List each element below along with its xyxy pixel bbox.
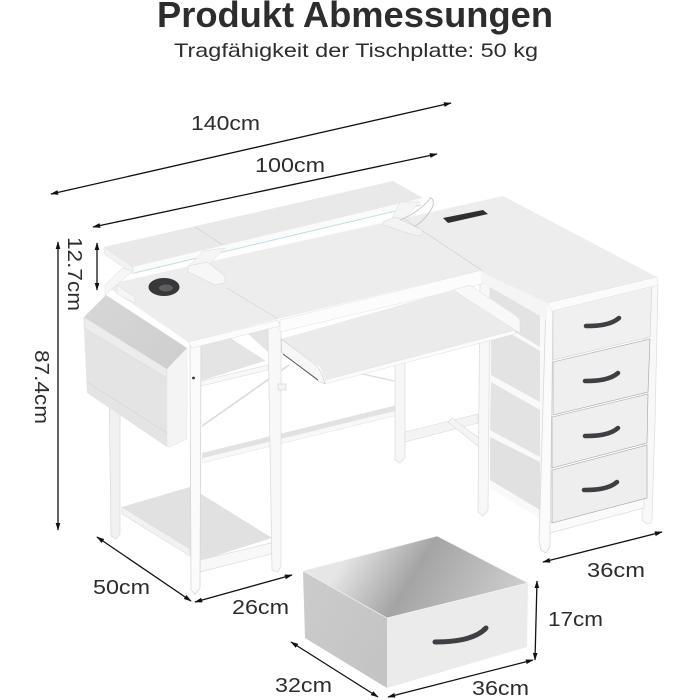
drawers: [553, 283, 652, 360]
dimension labels: 36cm: [587, 560, 645, 582]
middle leg and braces: [358, 361, 479, 463]
dimension labels: 140cm: [191, 113, 260, 135]
keyboard tray: [281, 285, 520, 384]
drawer cabinet: [478, 280, 658, 553]
dimension labels: 87.4cm: [30, 350, 52, 424]
loose drawer: [303, 536, 528, 688]
dimension labels: 17cm: [548, 609, 603, 631]
dimension labels: 26cm: [232, 597, 289, 619]
power strip: [443, 210, 488, 223]
left legs and lower shelf: [109, 322, 398, 594]
dimension arrows: [51, 103, 662, 697]
subtitle: load capacity: Tragfähigkeit der Tischplatte: 50 kg: [174, 40, 538, 62]
drawer handle: [435, 628, 486, 642]
dimension labels: 12.7cm: [63, 237, 85, 311]
dimension labels: [30, 113, 645, 700]
dimension labels: 32cm: [275, 675, 332, 697]
side storage bag: [84, 295, 187, 447]
dimension labels: 36cm: [472, 678, 529, 700]
dimension labels: 100cm: [255, 155, 325, 177]
back rail: [202, 405, 398, 458]
back panel behind middle shelf: [247, 328, 268, 352]
desk illustration: [84, 181, 658, 594]
desktop L-shape: [105, 196, 658, 348]
monitor shelf and risers: [104, 181, 433, 303]
dimension labels: 50cm: [93, 577, 150, 599]
side fabric panels: [490, 287, 540, 347]
hanging hooks: [278, 384, 286, 390]
drawer handles: [584, 318, 619, 490]
grommet: [148, 278, 180, 296]
